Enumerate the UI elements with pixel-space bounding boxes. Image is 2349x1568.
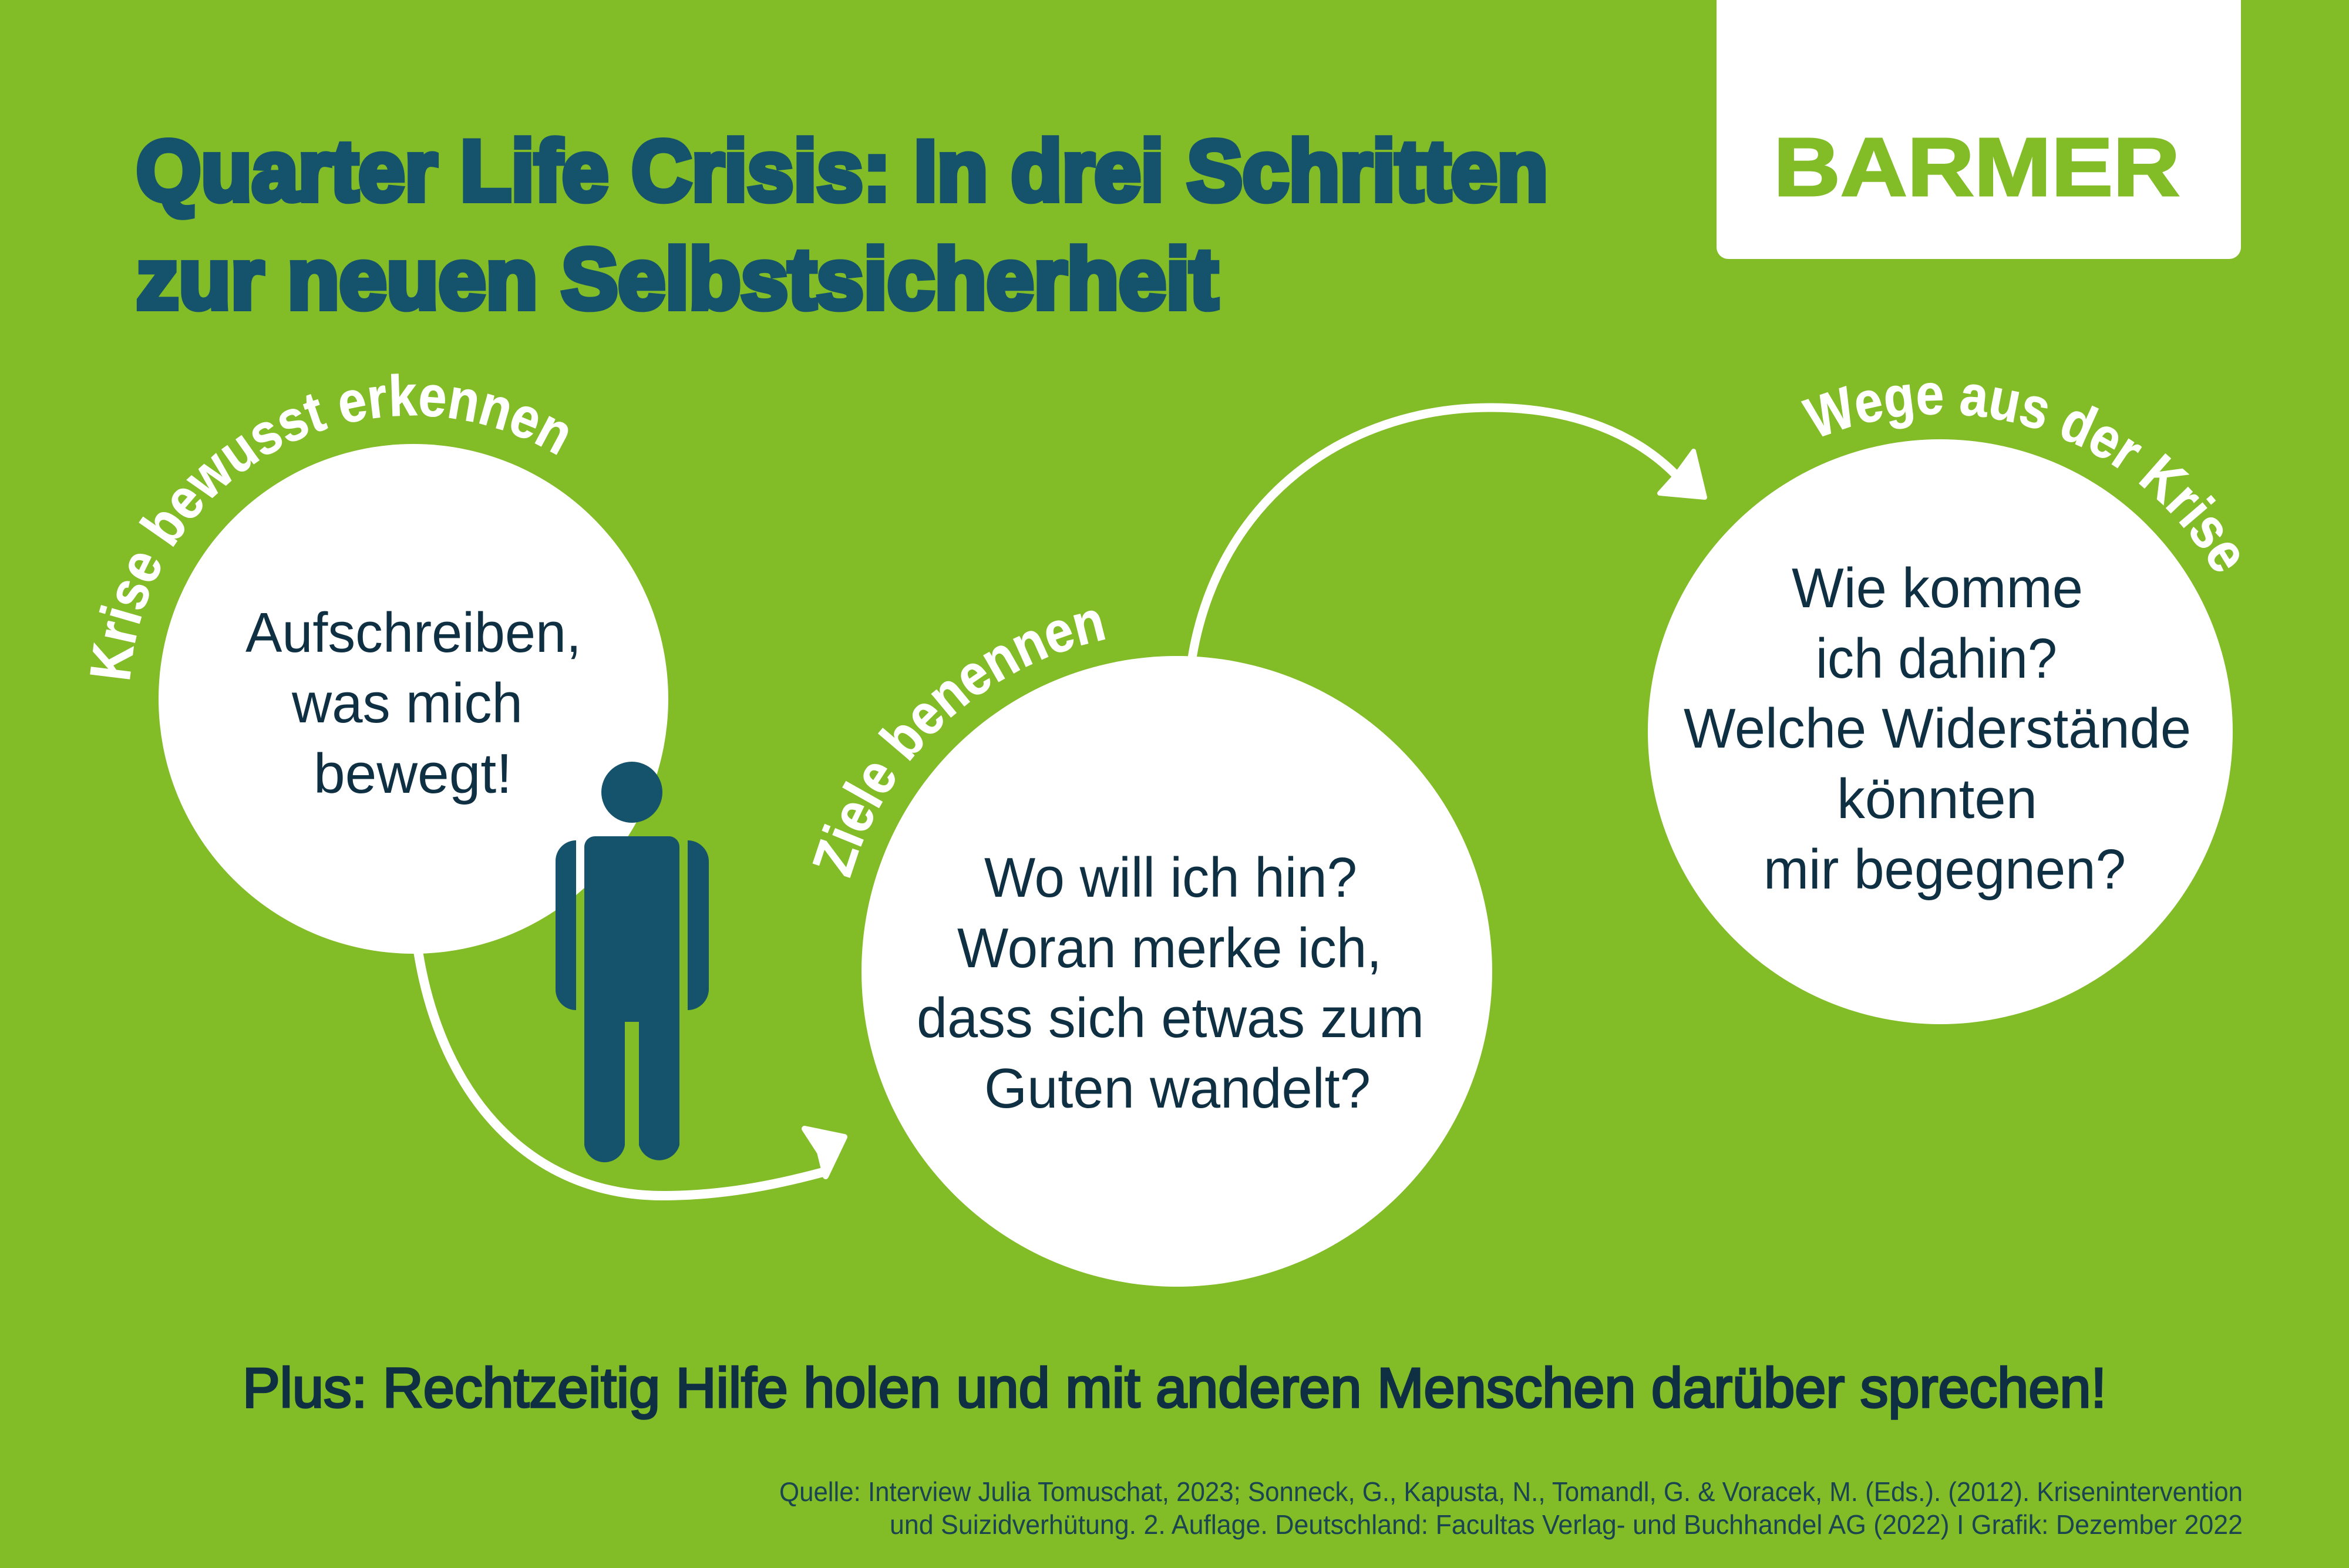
text block: step three	[1684, 557, 2191, 901]
panel: step two circle	[813, 611, 1492, 1287]
text block: step two	[917, 846, 1424, 1120]
icon: standing person	[556, 762, 709, 1162]
text block: step one: was mich	[291, 672, 523, 735]
text block: step three: Wie komme	[1792, 557, 2083, 620]
logo panel: BARMER	[1717, 0, 2241, 259]
text block: step two: Wo will ich hin?	[984, 846, 1357, 909]
source text: Quelle: Interview Julia Tomuschat, 2023; Sonneck, G., Kapusta, N., Tomandl, G. & Voracek, M. (Eds.). (2012). Krisenintervention	[779, 1476, 2243, 1507]
text block: step one: Aufschreiben,	[245, 601, 581, 664]
title	[136, 123, 1548, 327]
arrow: step two to step three	[1192, 408, 1705, 658]
text block: step three: mir begegnen?	[1764, 838, 2126, 901]
panel: step three circle	[1648, 383, 2239, 1024]
source text: und Suizidverhütung. 2. Auflage. Deutschland: Facultas Verlag- und Buchhandel AG (2022) I Grafik: Dezember 2022	[890, 1509, 2243, 1540]
title: zur neuen Selbstsicherheit	[136, 231, 1218, 327]
curved heading: step three: Wege aus der Krise	[1801, 383, 2239, 571]
text block: step two: Guten wandelt?	[984, 1057, 1371, 1120]
text block: step two: dass sich etwas zum	[917, 987, 1424, 1049]
curved heading: step two: Ziele benennen	[813, 611, 1105, 878]
curved heading: step one: Krise bewusst erkennen	[90, 374, 568, 679]
text block: step one	[245, 601, 581, 805]
text block: step three: könnten	[1837, 768, 2037, 830]
text block: step three: Welche Widerstände	[1684, 697, 2191, 760]
source text	[779, 1476, 2243, 1540]
callout: plus line: Plus: Rechtzeitig Hilfe holen und mit anderen Menschen darüber sprechen!	[243, 1357, 2106, 1419]
logo panel: BARMER: BARMER	[1773, 120, 2180, 213]
panel: step one circle	[90, 374, 668, 954]
text block: step one: bewegt!	[314, 742, 512, 805]
text block: step two: Woran merke ich,	[957, 917, 1382, 980]
arrow: step one to step two	[418, 951, 844, 1196]
title: Quarter Life Crisis: In drei Schritten	[136, 123, 1548, 218]
text block: step three: ich dahin?	[1816, 627, 2057, 690]
